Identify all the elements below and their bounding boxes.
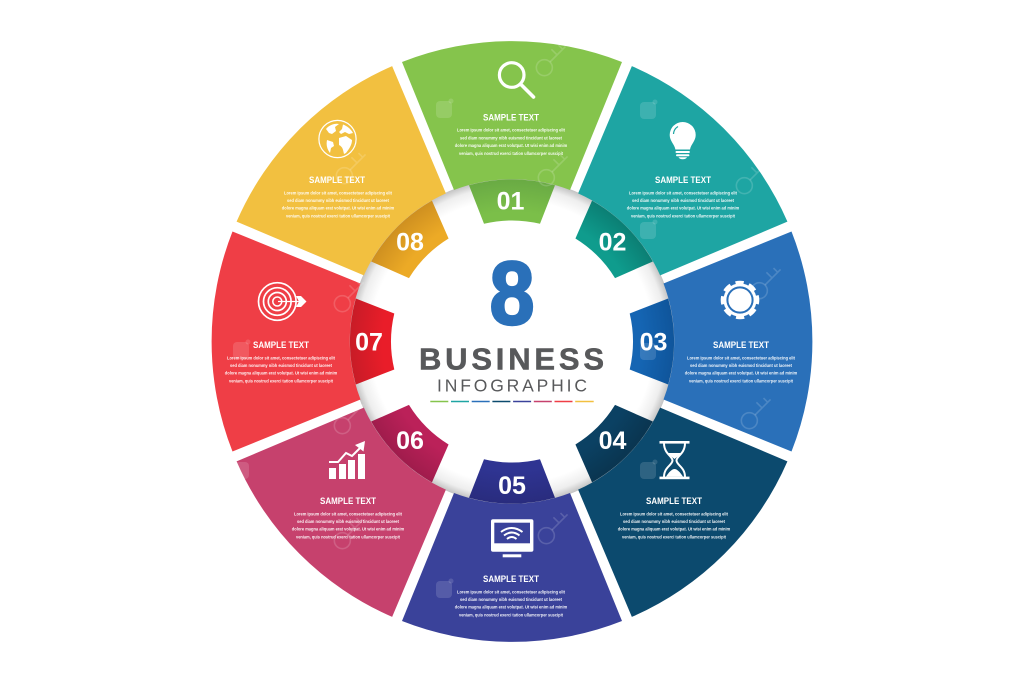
text block 02: dolore magna aliquam erat volutpat. Ut wisi enim ad minim [627, 206, 740, 212]
icon: target with arrow [258, 283, 306, 320]
segment 04 wedge [541, 371, 802, 632]
heading 03: SAMPLE TEXT [713, 340, 770, 350]
text block 05: dolore magna aliquam erat volutpat. Ut wisi enim ad minim [455, 605, 568, 611]
panel: segment 08 [222, 51, 483, 312]
segment 05 wedge [402, 493, 622, 642]
text block 04: Lorem ipsum dolor sit amet, consectetuer adipiscing elit [620, 511, 728, 517]
text block 03: veniam, quis nostrud exerci tation ullamcorper suscipit [689, 378, 793, 384]
text block 01: Lorem ipsum dolor sit amet, consectetuer adipiscing elit [457, 128, 565, 134]
heading 05: SAMPLE TEXT [483, 574, 540, 584]
text block 03: dolore magna aliquam erat volutpat. Ut wisi enim ad minim [685, 371, 798, 377]
icon: light bulb [670, 122, 696, 159]
icon: hourglass [660, 441, 690, 479]
text block 07: veniam, quis nostrud exerci tation ullamcorper suscipit [229, 378, 333, 384]
number 03: 03 [640, 328, 667, 356]
text block 01: sed diam nonummy nibh euismod tincidunt ut laoreet [460, 135, 562, 141]
subheading: INFOGRAPHIC: INFOGRAPHIC [437, 376, 587, 396]
icon: gear [723, 283, 757, 317]
text block 01 [455, 128, 568, 157]
color dash legend [430, 400, 594, 402]
panel: segment 05 [402, 459, 622, 642]
text block 08: sed diam nonummy nibh euismod tincidunt ut laoreet [287, 198, 389, 204]
text block 01: dolore magna aliquam erat volutpat. Ut wisi enim ad minim [455, 143, 568, 149]
tab 08 [367, 197, 459, 289]
big number 8: 8 [489, 243, 535, 344]
heading 08: SAMPLE TEXT [309, 175, 366, 185]
heading 07: SAMPLE TEXT [253, 340, 310, 350]
heading 01: SAMPLE TEXT [483, 112, 540, 122]
text block 06 [292, 511, 405, 540]
icon: growth chart [329, 441, 365, 479]
text block 07: Lorem ipsum dolor sit amet, consectetuer adipiscing elit [227, 355, 335, 361]
text block 06: veniam, quis nostrud exerci tation ullamcorper suscipit [296, 534, 400, 540]
tab 05 [469, 459, 555, 504]
segment 06 wedge [222, 371, 483, 632]
tab 03 [630, 298, 674, 384]
text block 06: dolore magna aliquam erat volutpat. Ut wisi enim ad minim [292, 527, 405, 533]
tab 07 [350, 298, 394, 384]
tab 06 [367, 394, 459, 486]
number 04: 04 [599, 427, 626, 455]
heading 06: SAMPLE TEXT [320, 496, 377, 506]
number 02: 02 [599, 228, 626, 256]
icon: globe [319, 120, 356, 158]
text block 08: dolore magna aliquam erat volutpat. Ut wisi enim ad minim [282, 206, 395, 212]
text block 02: Lorem ipsum dolor sit amet, consectetuer adipiscing elit [629, 190, 737, 196]
tab 02 [565, 197, 657, 289]
heading 02: SAMPLE TEXT [655, 175, 712, 185]
panel: segment 07 [212, 232, 394, 452]
panel: segment 03 [630, 232, 812, 452]
text block 04 [618, 511, 731, 540]
segment 07 wedge [212, 232, 360, 452]
text block 07: dolore magna aliquam erat volutpat. Ut wisi enim ad minim [225, 371, 338, 377]
center white circle with shadow [349, 178, 675, 504]
segment 01 wedge [402, 41, 622, 190]
number 07: 07 [355, 328, 383, 356]
number 08: 08 [396, 228, 424, 256]
text block 05: Lorem ipsum dolor sit amet, consectetuer adipiscing elit [457, 589, 565, 595]
text block 03: Lorem ipsum dolor sit amet, consectetuer adipiscing elit [687, 355, 795, 361]
panel: segment 04 [541, 371, 802, 632]
text block 07: sed diam nonummy nibh euismod tincidunt ut laoreet [230, 363, 332, 369]
text block 08 [282, 190, 395, 219]
text block 05 [455, 589, 568, 618]
text block 03 [685, 355, 798, 384]
text block 01: veniam, quis nostrud exerci tation ullamcorper suscipit [459, 151, 563, 157]
text block 04: sed diam nonummy nibh euismod tincidunt ut laoreet [623, 519, 725, 525]
number 06: 06 [396, 427, 424, 455]
tab 04 [565, 394, 657, 486]
number 05: 05 [498, 472, 526, 500]
icon: monitor with wifi [491, 519, 533, 557]
text block 03: sed diam nonummy nibh euismod tincidunt ut laoreet [690, 363, 792, 369]
text block 06: sed diam nonummy nibh euismod tincidunt ut laoreet [297, 519, 399, 525]
segment 08 wedge [222, 51, 483, 312]
segment 03 wedge [664, 232, 812, 452]
panel: segment 02 [541, 51, 802, 312]
text block 07 [225, 355, 338, 384]
icon: magnifying glass [499, 63, 534, 97]
panel: segment 01 [402, 41, 622, 224]
text block 02: veniam, quis nostrud exerci tation ullamcorper suscipit [631, 213, 735, 219]
number 01: 01 [497, 187, 524, 215]
text block 08: veniam, quis nostrud exerci tation ullamcorper suscipit [286, 213, 390, 219]
heading: BUSINESS: BUSINESS [419, 341, 604, 376]
text block 02: sed diam nonummy nibh euismod tincidunt ut laoreet [632, 198, 734, 204]
heading 04: SAMPLE TEXT [646, 496, 703, 506]
text block 04: dolore magna aliquam erat volutpat. Ut wisi enim ad minim [618, 527, 731, 533]
text block 06: Lorem ipsum dolor sit amet, consectetuer adipiscing elit [294, 511, 402, 517]
text block 05: sed diam nonummy nibh euismod tincidunt ut laoreet [460, 597, 562, 603]
tab 01 [469, 179, 555, 224]
panel: segment 06 [222, 371, 483, 632]
text block 02 [627, 190, 740, 219]
center title [419, 243, 604, 402]
text block 05: veniam, quis nostrud exerci tation ullamcorper suscipit [459, 612, 563, 618]
segment 02 wedge [541, 51, 802, 312]
text block 04: veniam, quis nostrud exerci tation ullamcorper suscipit [622, 534, 726, 540]
text block 08: Lorem ipsum dolor sit amet, consectetuer adipiscing elit [284, 190, 392, 196]
